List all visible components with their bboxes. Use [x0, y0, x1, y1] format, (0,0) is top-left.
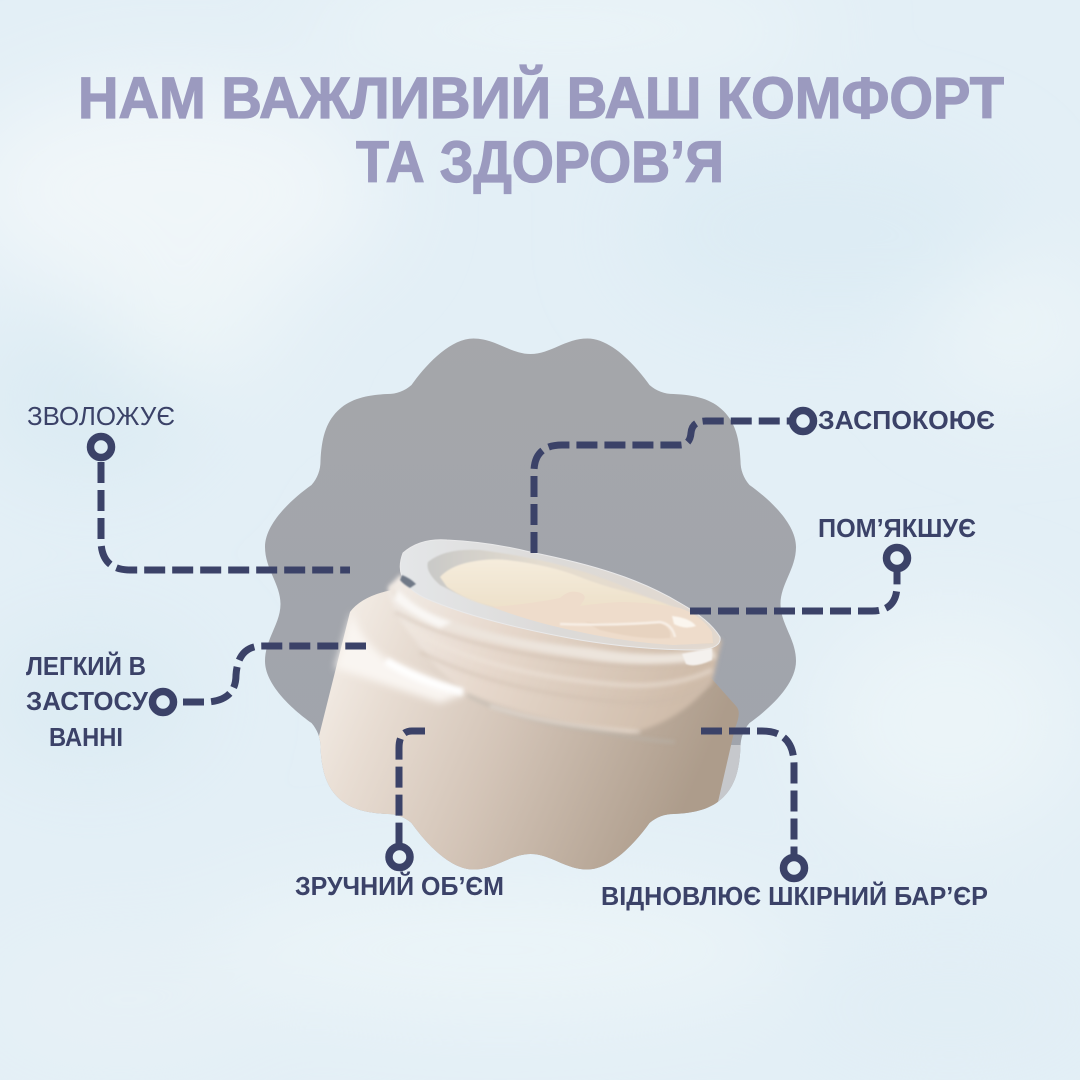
- grey photo backdrop: [265, 338, 796, 870]
- connector: ЛЕГКИЙ В ЗАСТОСУВАННІ: [152, 646, 366, 712]
- jar body: [312, 590, 739, 890]
- connector: ЗВОЛОЖУЄ: [90, 436, 350, 570]
- label: ЗАСПОКОЮЄ: ЗАСПОКОЮЄ: [818, 405, 995, 435]
- label: ЛЕГКИЙ В ЗАСТОСУВАННІ: [26, 651, 149, 752]
- cream light line: [560, 622, 675, 637]
- connector: ПОМ’ЯКШУЄ: [690, 548, 908, 611]
- glass rim outer: [400, 540, 720, 650]
- jar neck: [388, 575, 722, 733]
- label: ЗРУЧНИЙ ОБ’ЄМ: ЗРУЧНИЙ ОБ’ЄМ: [295, 871, 504, 901]
- label: ПОМ’ЯКШУЄ: ПОМ’ЯКШУЄ: [818, 513, 976, 543]
- connector: ЗРУЧНИЙ ОБ’ЄМ: [389, 731, 425, 868]
- cream back: [440, 559, 670, 607]
- glass lip highlight: [466, 628, 717, 666]
- jar shoulder highlight: [335, 612, 467, 703]
- inner opening: [427, 550, 592, 592]
- label: ЗВОЛОЖУЄ: ЗВОЛОЖУЄ: [27, 401, 175, 431]
- label: ВІДНОВЛЮЄ ШКІРНИЙ БАР’ЄР: ВІДНОВЛЮЄ ШКІРНИЙ БАР’ЄР: [601, 881, 988, 911]
- title: [78, 66, 1004, 195]
- glass drip highlight: [682, 648, 712, 665]
- connector: ЗАСПОКОЮЄ: [534, 410, 814, 553]
- label: ЛЕГКИЙ В ЗАСТОСУВАННІ: ЛЕГКИЙ В: [26, 651, 146, 681]
- cream fold: [596, 624, 670, 638]
- white glass left part: [394, 590, 452, 628]
- scalloped photo panel with cream jar: [265, 338, 796, 870]
- connector: ВІДНОВЛЮЄ ШКІРНИЙ БАР’ЄР: [701, 731, 804, 878]
- neck light band: [514, 668, 712, 688]
- glass seam line: [468, 694, 492, 706]
- cream highlight: [672, 616, 696, 628]
- silver sliver at jar edge: [718, 745, 740, 802]
- title: ТА ЗДОРОВ’Я: [356, 130, 724, 195]
- label: ЛЕГКИЙ В ЗАСТОСУВАННІ: ЗАСТОСУ: [26, 686, 149, 716]
- label: ЛЕГКИЙ В ЗАСТОСУВАННІ: ВАННІ: [49, 722, 123, 752]
- neck ridges: [396, 611, 502, 681]
- rim dark spot: [400, 575, 416, 588]
- white gloss: [386, 661, 463, 692]
- title: НАМ ВАЖЛИВИЙ ВАШ КОМФОРТ: [78, 66, 1004, 131]
- cream front swirl: [498, 608, 713, 645]
